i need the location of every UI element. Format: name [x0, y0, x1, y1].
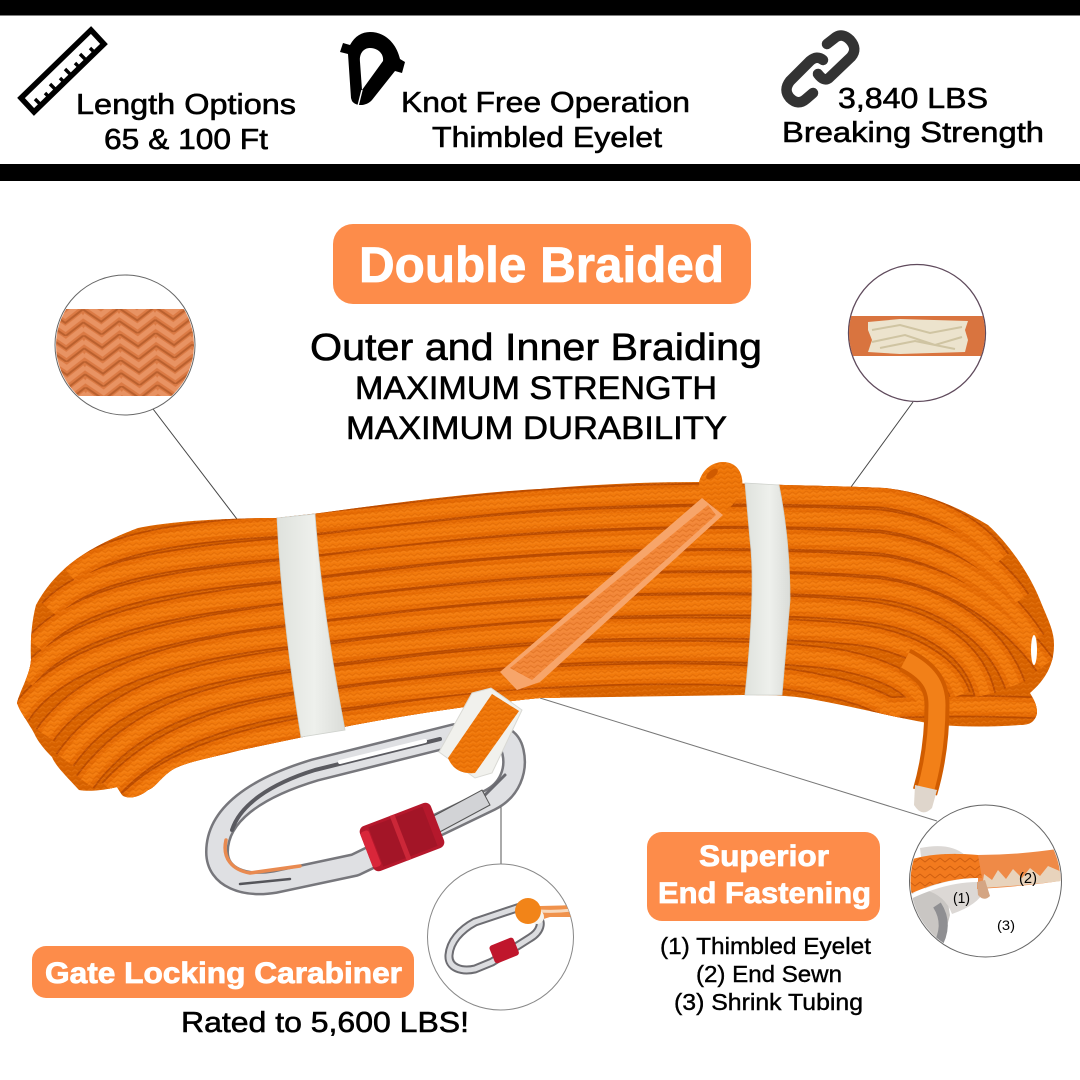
strap band left [277, 514, 345, 737]
list: end fastening parts: (3) Shrink Tubing [674, 989, 863, 1015]
illustration: carabiner [217, 688, 522, 884]
carabiner body [217, 735, 514, 884]
white eyelet edge [908, 880, 978, 898]
strap band right [745, 483, 790, 695]
lower black bar [0, 164, 1080, 181]
text: length options: 65 & 100 Ft [104, 124, 268, 156]
inset: inner braid circle [845, 264, 990, 402]
top rope loop [699, 462, 742, 513]
badge: superior end fastening: Superior [699, 840, 829, 873]
list: end fastening parts: (1) Thimbled Eyelet [660, 933, 872, 959]
badge: gate locking carabiner: Gate Locking Carabiner [45, 957, 402, 990]
inset: carabiner circle [428, 864, 574, 1010]
shrink tube [500, 498, 723, 690]
mini rope [515, 898, 574, 924]
inset: end fastening circle [905, 805, 1066, 957]
subheading text: Outer and Inner Braiding [310, 327, 762, 369]
tube section [977, 848, 1066, 889]
list: end fastening parts [660, 933, 872, 1015]
text: knot free: Thimbled Eyelet [432, 122, 662, 154]
braid section [905, 854, 982, 895]
text: carabiner rating: Rated to 5,600 LBS! [181, 1007, 469, 1039]
heading badge: double braided [333, 224, 751, 304]
rope tail [905, 660, 937, 812]
feature: knot free operation [340, 32, 690, 154]
label (1): (1) [953, 890, 970, 907]
callout line: end fastening [540, 698, 937, 821]
shrink nub [977, 880, 990, 899]
icon: ruler [21, 30, 104, 112]
label (2): (2) [1019, 870, 1037, 887]
inset: outer braid circle [50, 275, 200, 415]
feature: breaking strength [782, 36, 1044, 149]
feature: length options [21, 30, 296, 156]
text: breaking strength [782, 83, 1044, 149]
subheading text [310, 327, 762, 446]
text: knot free: Knot Free Operation [401, 87, 690, 119]
label (3): (3) [997, 917, 1015, 933]
text: length options: Length Options [76, 89, 296, 121]
badge: gate locking carabiner [32, 946, 414, 998]
list: end fastening parts: (2) End Sewn [696, 961, 842, 987]
heading badge: double braided: Double Braided [359, 237, 724, 293]
mini carabiner [449, 907, 540, 970]
thimble detail [920, 846, 985, 914]
text: length options [76, 89, 296, 156]
callout line: inner braid [843, 402, 913, 498]
locking sleeve [358, 801, 446, 873]
callout line: carabiner [500, 805, 502, 864]
thimble eyelet [439, 688, 522, 778]
subheading text: MAXIMUM DURABILITY [346, 410, 727, 446]
sewn section [982, 866, 1062, 888]
subheading text: MAXIMUM STRENGTH [355, 370, 717, 406]
text: breaking strength: Breaking Strength [782, 117, 1044, 149]
illustration: rope coil [0, 450, 1080, 812]
callout line: outer braid [150, 405, 243, 527]
carabiner detail [912, 891, 950, 942]
braided rope in eyelet [448, 694, 519, 773]
badge: superior end fastening: End Fastening [658, 877, 871, 910]
mini sleeve [490, 938, 519, 964]
gate pin [430, 790, 490, 834]
badge: superior end fastening [647, 832, 880, 921]
icon: thimble [340, 32, 405, 106]
icon: chain link [786, 36, 854, 102]
coil body [17, 482, 1054, 798]
text: breaking strength: 3,840 LBS [838, 83, 988, 115]
top black bar [0, 0, 1080, 16]
text: knot free [401, 87, 690, 154]
